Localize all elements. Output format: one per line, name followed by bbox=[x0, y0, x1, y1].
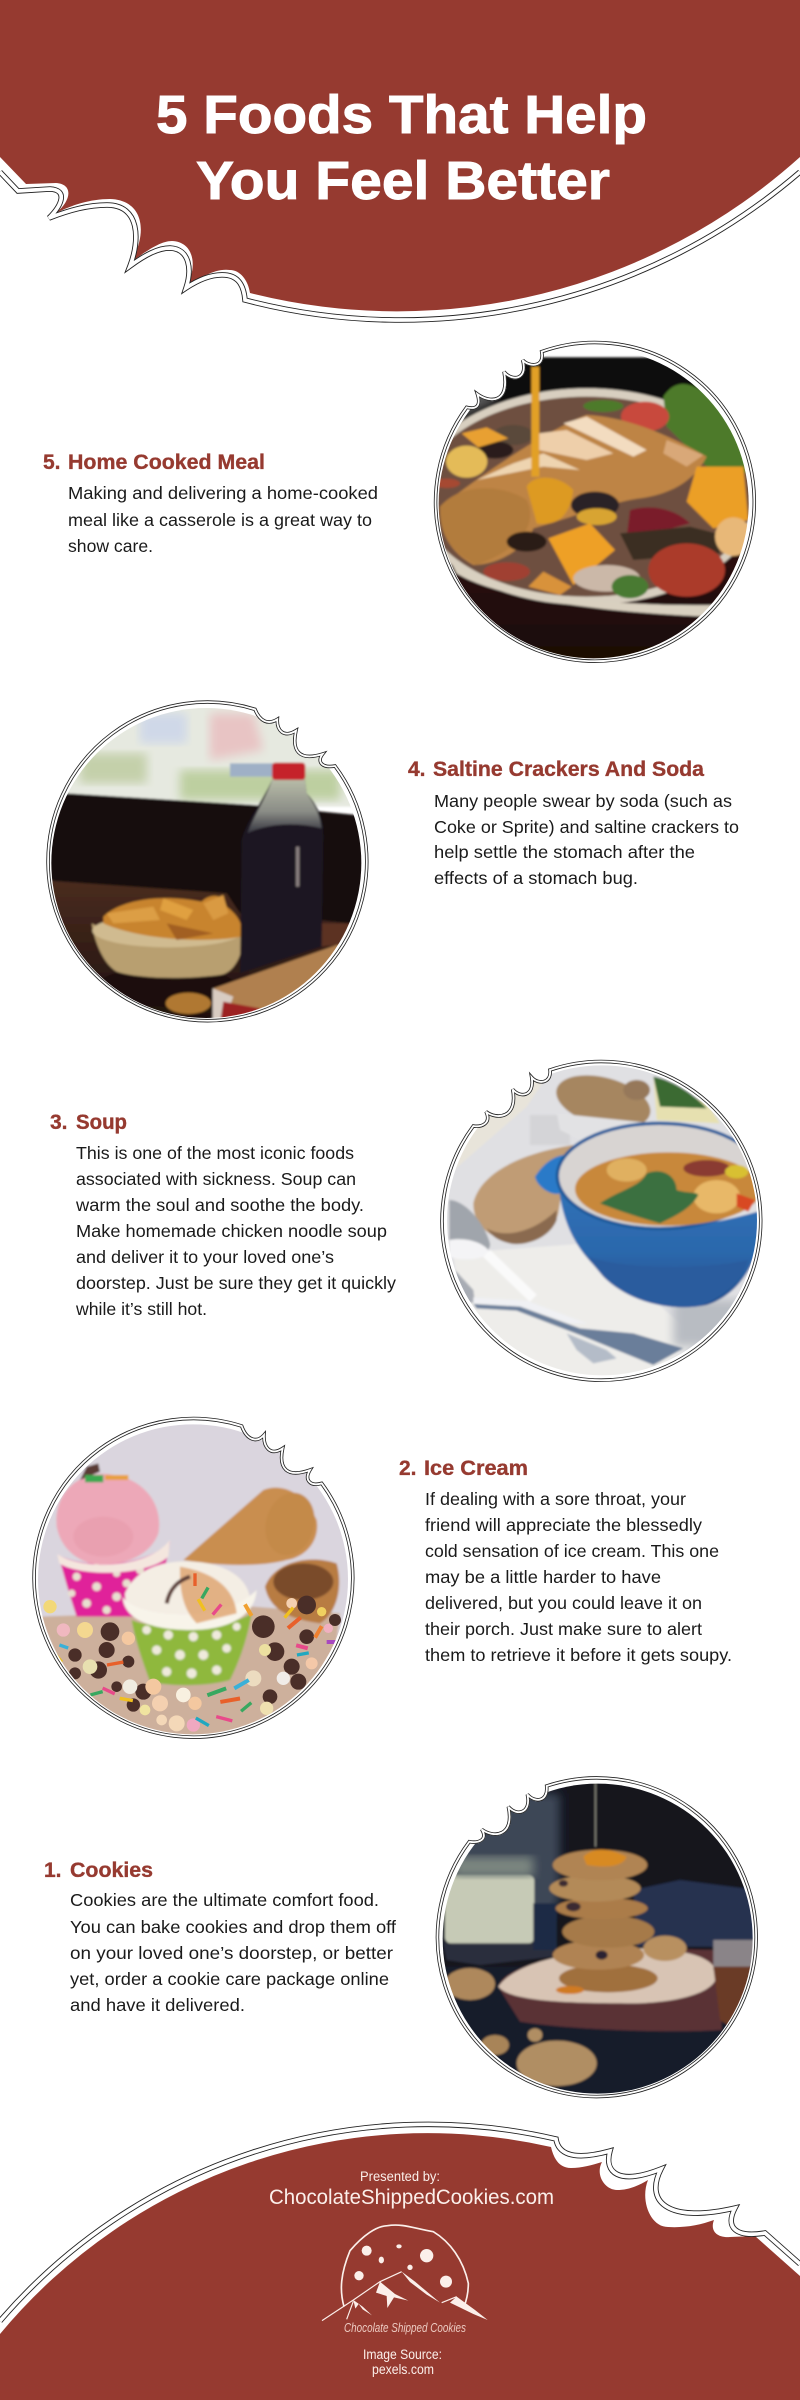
item 2 text: ice cream: Ice Cream bbox=[424, 1457, 528, 1480]
photo: home cooked meal bowl bbox=[434, 340, 756, 663]
item 1 text: cookies: Cookies bbox=[70, 1859, 153, 1882]
item 3 text: soup: associated with sickness. Soup can bbox=[76, 1169, 356, 1189]
photo: cookies bbox=[433, 1760, 767, 2107]
header banner bbox=[0, 0, 800, 320]
item 2 text: ice cream bbox=[399, 1457, 732, 1665]
item 2 text: ice cream: 2. bbox=[399, 1457, 417, 1480]
title: 5 Foods That Help bbox=[156, 85, 647, 145]
item 4 text: saltine crackers and soda: 4. bbox=[408, 758, 426, 781]
item 5 text: home cooked meal: 5. bbox=[43, 451, 61, 474]
item 1 text: cookies: You can bake cookies and drop them off bbox=[70, 1917, 396, 1937]
item 3 text: soup: warm the soul and soothe the body. bbox=[75, 1195, 364, 1215]
presented by text bbox=[269, 2169, 554, 2209]
item 2 text: ice cream: them to retrieve it before it gets soupy. bbox=[425, 1645, 732, 1665]
item 4 text: saltine crackers and soda: help settle the stomach after the bbox=[434, 842, 695, 862]
item 5 text: home cooked meal bbox=[43, 451, 378, 556]
item 1 text: cookies: and have it delivered. bbox=[70, 1995, 245, 2015]
logo: cookie and mountains bbox=[322, 2225, 488, 2321]
logo caption: Chocolate Shipped Cookies bbox=[344, 2321, 466, 2335]
item 4 text: saltine crackers and soda bbox=[408, 758, 739, 888]
item 4 text: saltine crackers and soda: Saltine Crackers And Soda bbox=[433, 758, 704, 781]
image source text: Image Source: bbox=[363, 2347, 442, 2362]
item 4 text: saltine crackers and soda: effects of a stomach bug. bbox=[434, 868, 638, 888]
presented by text: ChocolateShippedCookies.com bbox=[269, 2186, 554, 2209]
photo: soup bbox=[440, 1043, 767, 1390]
photo: ice cream bbox=[30, 1403, 357, 1750]
image source text: pexels.com bbox=[372, 2362, 434, 2377]
item 3 text: soup: 3. bbox=[50, 1111, 68, 1134]
item 4 text: saltine crackers and soda: Coke or Sprite) and saltine crackers to bbox=[434, 817, 739, 837]
item 5 text: home cooked meal: Home Cooked Meal bbox=[68, 451, 265, 474]
photo: saltine crackers and soda bbox=[40, 687, 373, 1027]
item 2 text: ice cream: friend will appreciate the blessedly bbox=[425, 1515, 702, 1535]
presented by text: Presented by: bbox=[360, 2169, 440, 2184]
item 5 text: home cooked meal: Making and delivering a home-cooked bbox=[68, 483, 378, 503]
item 3 text: soup: while it’s still hot. bbox=[75, 1299, 207, 1319]
item 2 text: ice cream: may be a little harder to have bbox=[425, 1567, 661, 1587]
item 3 text: soup: This is one of the most iconic foods bbox=[76, 1143, 354, 1163]
item 3 text: soup: and deliver it to your loved one’s bbox=[76, 1247, 334, 1267]
item 2 text: ice cream: delivered, but you could leave it on bbox=[425, 1593, 702, 1613]
item 1 text: cookies: yet, order a cookie care package online bbox=[70, 1969, 389, 1989]
item 1 text: cookies: on your loved one’s doorstep, or better bbox=[70, 1943, 393, 1963]
image source text bbox=[363, 2347, 442, 2377]
item 3 text: soup: Make homemade chicken noodle soup bbox=[76, 1221, 387, 1241]
item 1 text: cookies: Cookies are the ultimate comfort food. bbox=[70, 1890, 379, 1910]
item 3 text: soup bbox=[50, 1111, 396, 1319]
title: You Feel Better bbox=[196, 151, 610, 211]
item 5 text: home cooked meal: show care. bbox=[68, 536, 153, 556]
item 1 text: cookies bbox=[44, 1859, 396, 2015]
title bbox=[156, 85, 647, 211]
item 4 text: saltine crackers and soda: Many people swear by soda (such as bbox=[434, 791, 732, 811]
item 5 text: home cooked meal: meal like a casserole is a great way to bbox=[68, 510, 372, 530]
item 2 text: ice cream: cold sensation of ice cream. This one bbox=[425, 1541, 719, 1561]
item 1 text: cookies: 1. bbox=[44, 1859, 62, 1882]
item 3 text: soup: Soup bbox=[76, 1111, 127, 1134]
item 2 text: ice cream: their porch. Just make sure to alert bbox=[425, 1619, 702, 1639]
item 2 text: ice cream: If dealing with a sore throat, your bbox=[425, 1489, 686, 1509]
item 3 text: soup: doorstep. Just be sure they get it quickly bbox=[76, 1273, 396, 1293]
footer banner bbox=[0, 2124, 800, 2400]
